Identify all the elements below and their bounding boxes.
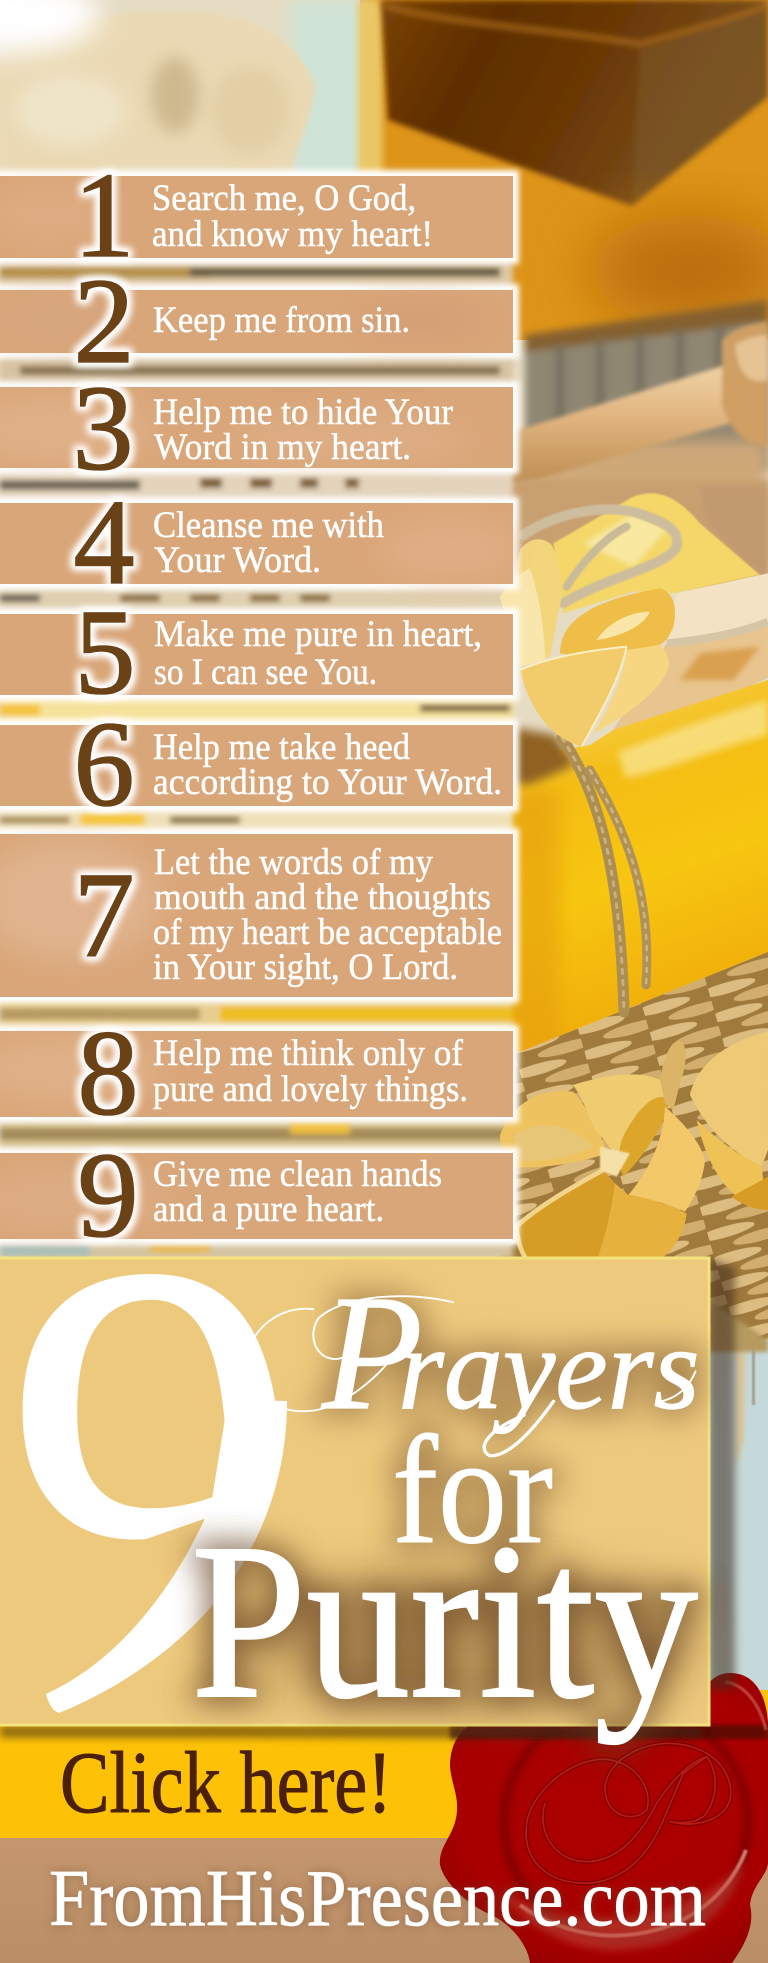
yellow bar corner at right of seal xyxy=(752,1690,768,1730)
prayer list xyxy=(0,148,520,1263)
prayer 6 xyxy=(74,697,502,832)
background: loofah sponge xyxy=(0,0,315,175)
prayer 7: in Your sight, O Lord. xyxy=(153,947,458,988)
title text shadows: rayers xyxy=(398,1303,700,1434)
icon: dried flowers lower xyxy=(500,1032,768,1260)
brown website band xyxy=(0,1838,768,1963)
prayer 9: and a pure heart. xyxy=(153,1189,384,1230)
prayer 7: Let the words of my xyxy=(154,842,433,883)
prayer 3: Help me to hide Your xyxy=(153,392,453,433)
prayer 3 xyxy=(72,361,453,496)
big numeral 9 xyxy=(22,1274,287,1713)
background: mint gap xyxy=(290,0,370,180)
prayer 3: Word in my heart. xyxy=(154,427,411,468)
prayer 5: Make me pure in heart, xyxy=(154,614,482,655)
panel shadow xyxy=(0,1258,735,1738)
prayer 9: 9 xyxy=(78,1128,138,1263)
website address: FromHisPresence.com xyxy=(49,1855,706,1943)
prayer 6: Help me take heed xyxy=(153,727,410,768)
icon: dried yellow flower upper xyxy=(500,539,675,747)
background: orange soap backdrop xyxy=(360,0,768,340)
prayer 8: pure and lovely things. xyxy=(153,1069,468,1110)
panel: title xyxy=(0,1256,722,1766)
background: pale yellow soap bar with twine and paper xyxy=(500,480,768,730)
footer: click bar and brown band xyxy=(0,1690,768,1963)
background: grey striped wood xyxy=(525,300,768,470)
background: pale blue wood right xyxy=(709,1300,768,1700)
heading: Prayers: P xyxy=(322,1261,423,1444)
prayer 7: of my heart be acceptable xyxy=(153,912,502,953)
broad tan haze around Purity xyxy=(240,1578,700,1702)
heading: for: for xyxy=(392,1404,553,1576)
prayer 9 xyxy=(78,1128,442,1263)
prayer 8: 8 xyxy=(78,1006,138,1141)
prayer 4: Your Word. xyxy=(154,540,321,581)
background: tan lower area xyxy=(500,440,768,570)
prayer 4: Cleanse me with xyxy=(153,505,384,546)
prayer box fills xyxy=(0,176,513,1239)
seal: rim shading xyxy=(504,1704,748,1940)
prayer 9: Give me clean hands xyxy=(153,1154,442,1195)
heading: Prayers xyxy=(247,1261,700,1456)
bands between the prayer boxes xyxy=(0,258,513,1259)
seal: upper shadow under panel xyxy=(450,1725,768,1739)
heading: Prayers: rayers xyxy=(398,1303,700,1434)
background: dark brown soap block xyxy=(381,0,768,206)
prayer 2 xyxy=(74,254,410,389)
prayer 7 xyxy=(74,842,502,988)
background: pale yellow edge xyxy=(358,0,382,190)
yellow click bar xyxy=(0,1725,768,1838)
heading: Purity: Purity xyxy=(191,1498,698,1745)
seal: lower sheen xyxy=(500,1860,745,1950)
faint texture in boxes xyxy=(0,187,520,1230)
prayer 6: according to Your Word. xyxy=(153,762,502,803)
prayer 8 xyxy=(78,1006,468,1141)
call to action: Click here: Click here! xyxy=(60,1735,392,1832)
background: woven basket xyxy=(500,952,768,1350)
panel background xyxy=(0,1258,709,1725)
title text shadows: P xyxy=(322,1261,423,1444)
background: wooden honey dipper xyxy=(500,322,768,490)
icon: seal monogram P xyxy=(526,1743,731,1883)
prayer 5: 5 xyxy=(74,585,136,720)
prayer 6: 6 xyxy=(74,697,134,832)
background: big yellow candle soap xyxy=(500,680,768,1060)
white glow behind boxes xyxy=(0,170,519,1245)
prayer 4: 4 xyxy=(74,475,134,610)
seal: lower rim highlight xyxy=(520,1850,746,1935)
prayer 4 xyxy=(74,475,384,610)
prayer 1: Search me, O God, xyxy=(152,178,416,219)
prayer 5 xyxy=(74,585,482,720)
icon: red wax seal xyxy=(440,1673,768,1963)
prayer 5: so I can see You. xyxy=(154,652,377,693)
prayer 1: 1 xyxy=(74,148,134,283)
prayer 1: and know my heart! xyxy=(152,214,433,255)
prayer 8: Help me think only of xyxy=(153,1033,464,1074)
prayer 1 xyxy=(74,148,433,283)
twine loops xyxy=(523,509,677,603)
background: darker orange shadow xyxy=(590,215,768,325)
prayer 2: 2 xyxy=(74,254,134,389)
title text shadows: for xyxy=(392,1404,553,1576)
prayer 7: 7 xyxy=(74,848,134,983)
title text shadows xyxy=(191,1261,700,1745)
big numeral 9: 9 xyxy=(3,1123,307,1854)
prayer 2: Keep me from sin. xyxy=(153,300,410,341)
background: twine hanging from flower xyxy=(562,738,647,1012)
seal: right lobe highlight xyxy=(725,1682,766,1730)
prayer 7: mouth and the thoughts xyxy=(154,877,491,918)
title text shadows: Purity xyxy=(191,1498,698,1745)
prayer 3: 3 xyxy=(72,361,134,496)
